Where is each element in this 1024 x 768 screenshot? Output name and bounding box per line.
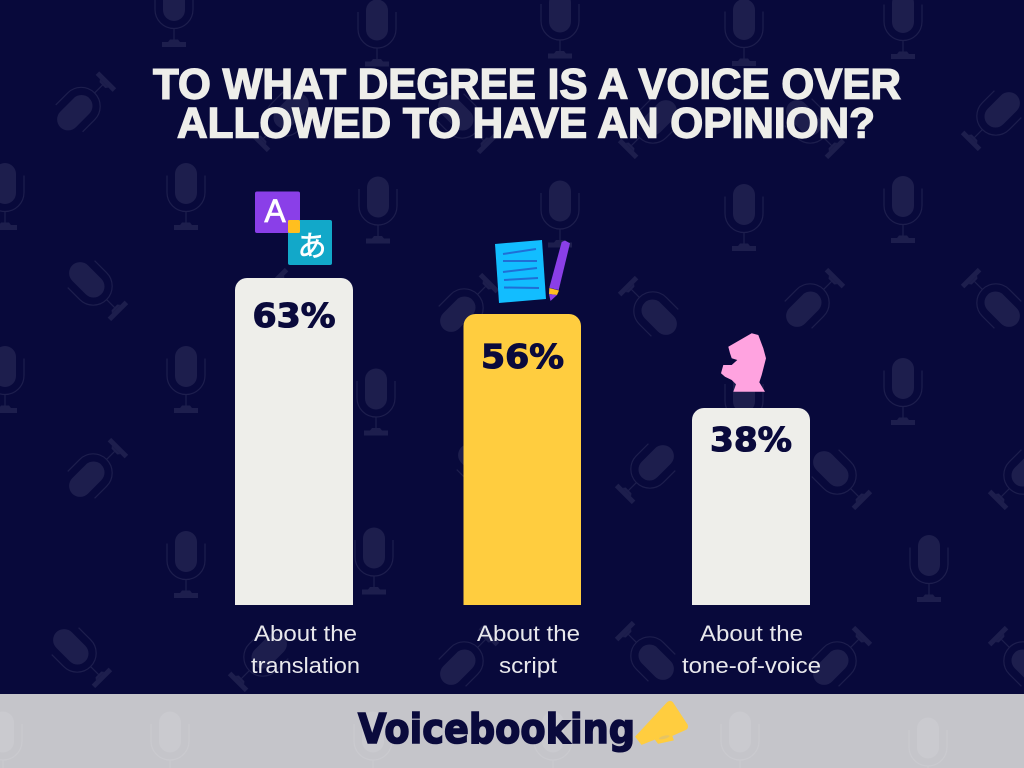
icon: script and pencil — [495, 240, 570, 303]
label: about the tone-of-voice: About the — [700, 621, 803, 646]
logo: Voicebooking wordmark: Voicebooking — [358, 705, 635, 753]
footer pattern: microphones — [0, 712, 947, 768]
value: 38%: 38% — [710, 420, 792, 459]
value: 63%: 63% — [252, 296, 336, 335]
title: ALLOWED TO HAVE AN OPINION? — [177, 100, 875, 148]
footer band — [0, 694, 1024, 768]
icon: translation: A — [264, 193, 286, 229]
label: about the script — [477, 621, 580, 678]
bar: about the script 56% — [464, 314, 581, 605]
label: about the translation — [251, 621, 360, 678]
title — [153, 60, 901, 148]
label: about the tone-of-voice — [682, 621, 821, 678]
bar: about the translation 63% — [235, 278, 353, 605]
label: about the script: About the — [477, 621, 580, 646]
value: 56%: 56% — [481, 337, 564, 376]
label: about the script: script — [499, 653, 557, 678]
title: TO WHAT DEGREE IS A VOICE OVER — [153, 60, 901, 108]
icon: megaphone — [636, 701, 687, 744]
icon: shouting head — [721, 333, 766, 392]
label: about the translation: About the — [254, 621, 357, 646]
icon: translation: あ — [297, 231, 327, 263]
icon: translation — [255, 192, 332, 265]
label: about the tone-of-voice: tone-of-voice — [682, 653, 821, 678]
label: about the translation: translation — [251, 653, 360, 678]
bar: about the tone-of-voice 38% — [692, 408, 810, 605]
